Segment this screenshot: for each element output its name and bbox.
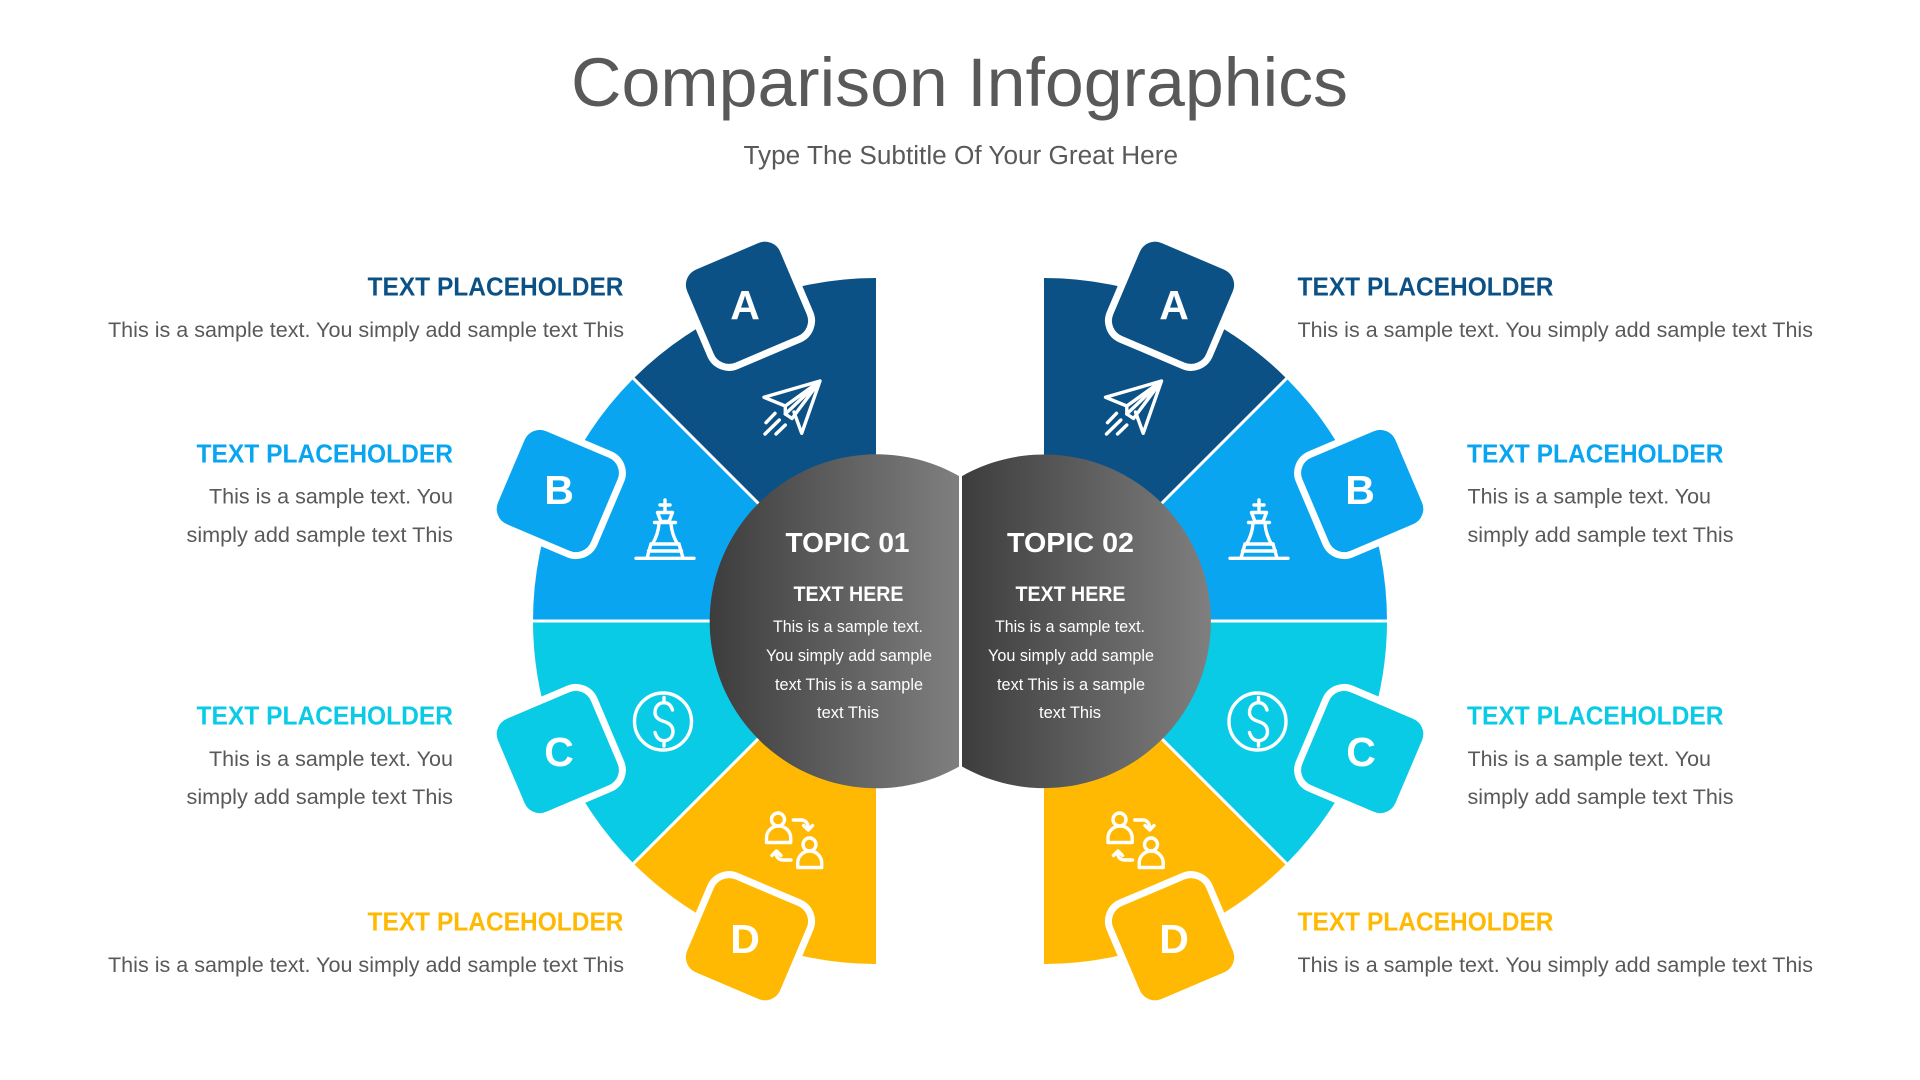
subtitle: Type The Subtitle Of Your Great Here: [744, 142, 1178, 170]
text block: left D: TEXT PLACEHOLDER: [368, 908, 624, 936]
icon: people exchange right: [1108, 813, 1163, 868]
badge C left: C: [544, 729, 574, 775]
text block: left C: [186, 702, 453, 809]
text block: right B: TEXT PLACEHOLDER: [1467, 440, 1724, 468]
icon: chess king left: [636, 500, 694, 558]
text block: left B: [186, 440, 453, 547]
title: Comparison Infographics: [571, 44, 1348, 121]
text block: left B: simply add sample text This: [186, 524, 453, 547]
text block: right B: [1467, 440, 1734, 547]
text block: right B: simply add sample text This: [1468, 524, 1734, 547]
text block: left C: simply add sample text This: [186, 786, 453, 809]
badge A right: [1102, 232, 1244, 374]
text block: left B: TEXT PLACEHOLDER: [196, 440, 453, 468]
badge A left: A: [730, 282, 760, 328]
badge C right: [1291, 681, 1433, 823]
icon: paper plane left: [764, 381, 820, 434]
text block: left D: [108, 908, 624, 977]
badge B left: [487, 420, 629, 562]
segment B right: [1044, 378, 1387, 621]
topic 02 body text: [988, 618, 1154, 722]
badge C left: [487, 681, 629, 823]
text block: right C: TEXT PLACEHOLDER: [1467, 702, 1724, 730]
topic 02 body text: You simply add sample: [988, 647, 1154, 665]
topic 02 body text: text This is a sample: [997, 676, 1145, 694]
text block: right D: TEXT PLACEHOLDER: [1298, 908, 1554, 936]
badge D left: [676, 868, 818, 1010]
topic 01 body text: You simply add sample: [766, 647, 932, 665]
badge B right: [1291, 420, 1433, 562]
text block: left A: [108, 274, 624, 342]
panel: left semicircle fan: [530, 278, 876, 964]
icon: dollar coin left: [634, 693, 692, 750]
text block: left C: This is a sample text. You: [209, 748, 453, 771]
icon: paper plane right: [1106, 381, 1162, 434]
text block: right D: This is a sample text. You simply add sample text This: [1298, 954, 1813, 977]
topic 01 body text: text This is a sample: [775, 676, 923, 694]
topic 02 heading: TOPIC 02: [1007, 527, 1134, 558]
segment D right: [1044, 621, 1286, 964]
topic 01 body text: [766, 618, 932, 722]
segment C left: [533, 621, 876, 864]
segment A right: [1044, 278, 1286, 621]
topic 02 body text: This is a sample text.: [995, 618, 1145, 636]
segment C right: [1044, 621, 1387, 864]
text block: right A: TEXT PLACEHOLDER: [1298, 274, 1554, 302]
topic 01 body text: text This: [817, 704, 879, 722]
topic 02 body text: text This: [1039, 704, 1101, 722]
segment A left: [634, 278, 876, 621]
text block: right B: This is a sample text. You: [1468, 486, 1711, 508]
segment D left: [634, 621, 876, 964]
text block: right C: simply add sample text This: [1468, 786, 1734, 809]
badge D left: D: [730, 916, 760, 962]
icon: people exchange left: [766, 813, 822, 868]
badge D right: [1102, 868, 1244, 1010]
text block: left A: This is a sample text. You simply add sample text This: [108, 319, 624, 342]
topic 01 heading: TOPIC 01: [786, 527, 910, 558]
panel: right semicircle fan: [1044, 278, 1390, 964]
topic 01 body text: This is a sample text.: [773, 618, 923, 636]
text block: left D: This is a sample text. You simply add sample text This: [108, 954, 624, 977]
text block: right A: [1298, 274, 1813, 342]
icon: dollar coin right: [1229, 693, 1286, 750]
badge A left: [676, 232, 818, 374]
panel: topic 01 circle: [710, 454, 959, 788]
topic 02 subheading: TEXT HERE: [1016, 582, 1126, 606]
badge B left: B: [544, 467, 574, 513]
text block: left A: TEXT PLACEHOLDER: [368, 274, 624, 302]
topic 01 subheading: TEXT HERE: [794, 582, 904, 606]
text block: right C: This is a sample text. You: [1468, 748, 1711, 771]
text block: right C: [1467, 702, 1734, 809]
text block: right D: [1298, 908, 1813, 977]
badge A right: A: [1159, 282, 1189, 328]
badge C right: C: [1346, 729, 1376, 775]
badge D right: D: [1159, 916, 1189, 962]
text block: left B: This is a sample text. You: [209, 486, 453, 508]
text block: left C: TEXT PLACEHOLDER: [196, 702, 453, 730]
segment B left: [533, 378, 876, 621]
icon: chess king right: [1230, 500, 1288, 558]
panel: topic 02 circle: [962, 454, 1211, 788]
text block: right A: This is a sample text. You simply add sample text This: [1298, 319, 1813, 342]
badge B right: B: [1345, 467, 1375, 513]
